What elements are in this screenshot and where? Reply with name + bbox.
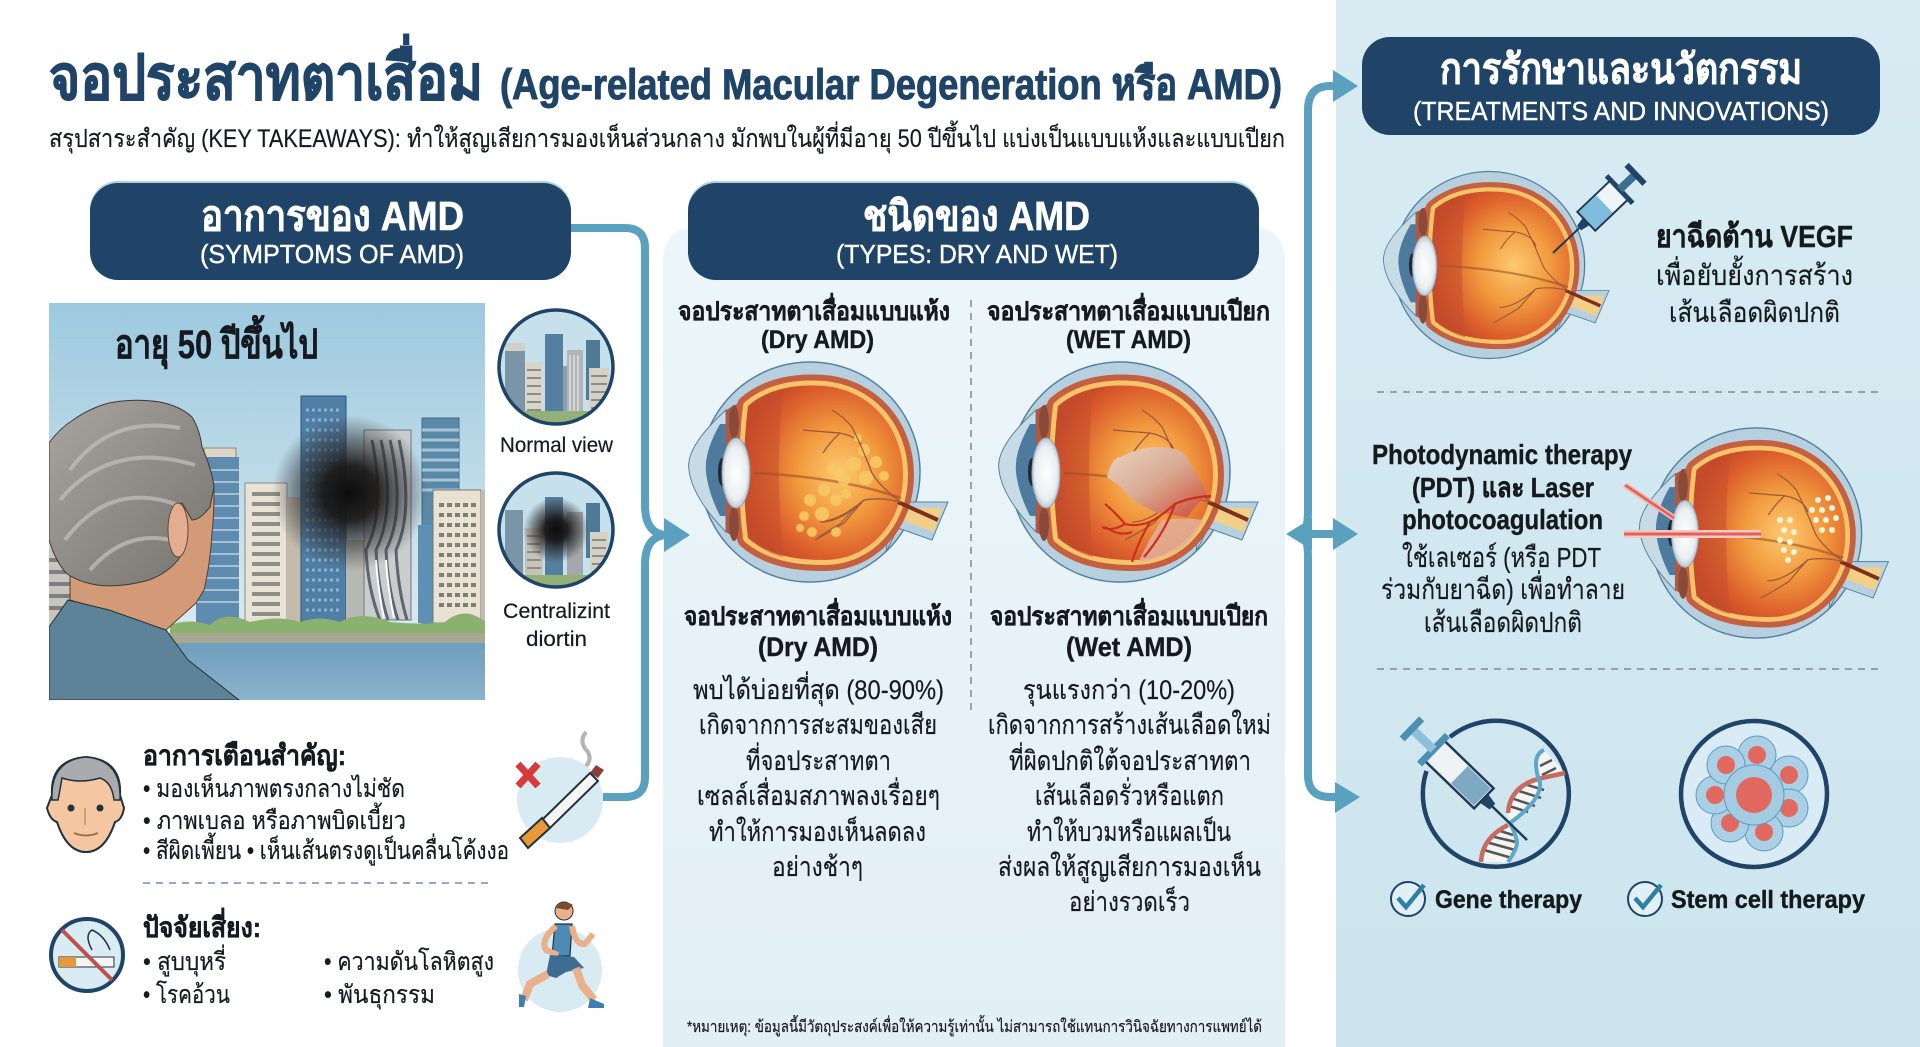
treatment: PDT and laser: ใช้เลเซอร์ (หรือ PDT	[1402, 541, 1601, 573]
illustration: dry AMD eye	[689, 362, 948, 582]
man: hair	[49, 400, 214, 586]
caption: central distortion: Centralizint	[503, 600, 610, 623]
column: wet AMD: (WET AMD)	[1066, 326, 1191, 354]
header: types	[688, 181, 1259, 280]
treatment: PDT and laser: Photodynamic therapy	[1372, 439, 1632, 470]
treatment: anti-VEGF injection: เส้นเลือดผิดปกติ	[1669, 297, 1840, 328]
arrow: types to treatments	[1286, 70, 1360, 813]
column: dry AMD: เกิดจากการสะสมของเสีย	[699, 710, 937, 740]
icon: runner	[518, 902, 604, 1012]
column: dry AMD: อย่างช้าๆ	[772, 852, 863, 882]
title: จอประสาทตาเสื่อม	[49, 34, 483, 113]
header: treatments: การรักษาและนวัตกรรม	[1440, 46, 1802, 92]
caption: central distortion	[503, 600, 610, 651]
column: wet AMD: เส้นเลือดรั่วหรือแตก	[1035, 777, 1224, 811]
text: warning symptoms: • สีผิดเพี้ยน • เห็นเส้นตรงดูเป็นคลื่นโค้งงอ	[143, 832, 509, 866]
text: risk factors	[143, 907, 494, 1010]
caption: central distortion: diortin	[526, 628, 587, 651]
column: wet AMD: อย่างรวดเร็ว	[1069, 884, 1190, 917]
subtitle: key takeaways: สรุปสาระสำคัญ (KEY TAKEAWAYS): ทำให้สูญเสียการมองเห็นส่วนกลาง มักพบในผู้ที่มีอายุ 50 ปีขึ้นไป แบ่งเป็นแบบแห้งและแบบเปียก	[49, 120, 1285, 154]
column: dry AMD: จอประสาทตาเสื่อมแบบแห้ง	[678, 292, 950, 326]
column: dry AMD: (Dry AMD)	[761, 326, 874, 354]
icon: no smoking sign	[51, 919, 123, 991]
column: wet AMD: เกิดจากการสร้างเส้นเลือดใหม่	[988, 709, 1271, 740]
column: wet AMD: ทำให้บวมหรือแผลเป็น	[1027, 814, 1231, 847]
column: wet AMD: จอประสาทตาเสื่อมแบบเปียก	[990, 597, 1268, 631]
text: risk factors: • ความดันโลหิตสูง	[324, 947, 494, 977]
normal view inset	[497, 308, 615, 426]
label: age 50+: อายุ 50 ปีขึ้นไป	[115, 315, 318, 370]
treatment: anti-VEGF injection	[1383, 161, 1853, 358]
man: ear	[168, 503, 188, 557]
text: warning symptoms: • ภาพเบลอ หรือภาพบิดเบี้ยว	[143, 802, 406, 835]
text: risk factors: • สูบบุหรี่	[143, 944, 226, 977]
column: dry AMD: เซลล์เสื่อมสภาพลงเรื่อยๆ	[697, 777, 940, 811]
label: stem cell therapy	[1628, 882, 1865, 916]
column: wet AMD: (Wet AMD)	[1066, 632, 1192, 662]
column: wet AMD: ส่งผลให้สูญเสียการมองเห็น	[998, 849, 1261, 883]
icon: gene therapy	[1398, 714, 1569, 867]
icon: stem cell	[1681, 721, 1827, 867]
man: jacket	[49, 600, 239, 700]
column: dry AMD: ทำให้การมองเห็นลดลง	[709, 814, 926, 847]
column: dry AMD: (Dry AMD)	[758, 632, 878, 662]
arrow: symptoms to types	[571, 228, 690, 797]
icon: elderly face	[47, 757, 124, 852]
text: risk factors: ปัจจัยเสี่ยง:	[143, 907, 261, 943]
illustration: eye with syringe	[1383, 161, 1649, 358]
label: gene therapy: Gene therapy	[1435, 886, 1582, 914]
column: wet AMD: รุนแรงกว่า (10-20%)	[1023, 675, 1235, 707]
text: risk factors: • พันธุกรรม	[324, 981, 435, 1010]
man: neck and face	[70, 488, 214, 630]
column: wet AMD	[987, 292, 1271, 917]
treatment: anti-VEGF injection: ยาฉีดต้าน VEGF	[1656, 219, 1853, 254]
panel: treatments background	[1336, 0, 1920, 1047]
distorted view inset	[497, 471, 615, 589]
panel: types background	[663, 227, 1285, 1047]
title	[49, 34, 1282, 113]
header: symptoms: อาการของ AMD	[201, 193, 464, 239]
caption: normal view: Normal view	[500, 434, 614, 457]
text: warning symptoms	[143, 740, 509, 866]
header: treatments	[1362, 37, 1880, 135]
column: dry AMD: จอประสาทตาเสื่อมแบบแห้ง	[684, 597, 952, 631]
footnote: *หมายเหตุ: ข้อมูลนี้มีวัตถุประสงค์เพื่อให้ความรู้เท่านั้น ไม่สามารถใช้แทนการวินิจฉัยทางการแพทย์ได้	[687, 1015, 1262, 1037]
header: types: (TYPES: DRY AND WET)	[836, 239, 1118, 269]
header: symptoms: (SYMPTOMS OF AMD)	[200, 239, 464, 269]
illustration: eye with laser beams	[1624, 428, 1888, 638]
column: dry AMD	[678, 292, 952, 882]
column: wet AMD: ที่ผิดปกติใต้จอประสาทตา	[1009, 742, 1251, 776]
treatment: PDT and laser: ร่วมกับยาฉีด) เพื่อทำลาย	[1381, 570, 1625, 605]
header: treatments: (TREATMENTS AND INNOVATIONS)	[1413, 96, 1829, 126]
treatment: PDT and laser: (PDT) และ Laser	[1412, 472, 1594, 503]
man: hair strands	[60, 426, 195, 570]
treatment: PDT and laser	[1372, 428, 1888, 638]
icon: no smoking cross and cigarette	[517, 732, 604, 848]
illustration: wet AMD eye	[999, 362, 1258, 582]
column: dry AMD: ที่จอประสาทตา	[746, 742, 891, 776]
column: dry AMD: พบได้บ่อยที่สุด (80-90%)	[693, 671, 944, 707]
illustration: man viewing city with central blur	[49, 303, 490, 703]
header: types: ชนิดของ AMD	[863, 193, 1090, 239]
treatment: PDT and laser: photocoagulation	[1402, 504, 1603, 535]
treatment: PDT and laser: เส้นเลือดผิดปกติ	[1424, 607, 1582, 638]
text: risk factors: • โรคอ้วน	[143, 980, 230, 1009]
label: gene therapy	[1391, 882, 1582, 916]
text: warning symptoms: • มองเห็นภาพตรงกลางไม่ชัด	[143, 773, 405, 803]
title: (Age-related Macular Degeneration หรือ AMD)	[500, 61, 1282, 109]
label: stem cell therapy: Stem cell therapy	[1671, 886, 1865, 914]
treatment: anti-VEGF injection: เพื่อยับยั้งการสร้าง	[1656, 255, 1853, 291]
text: warning symptoms: อาการเตือนสำคัญ:	[143, 740, 346, 772]
column: wet AMD: จอประสาทตาเสื่อมแบบเปียก	[987, 292, 1270, 326]
header: symptoms	[90, 181, 571, 280]
